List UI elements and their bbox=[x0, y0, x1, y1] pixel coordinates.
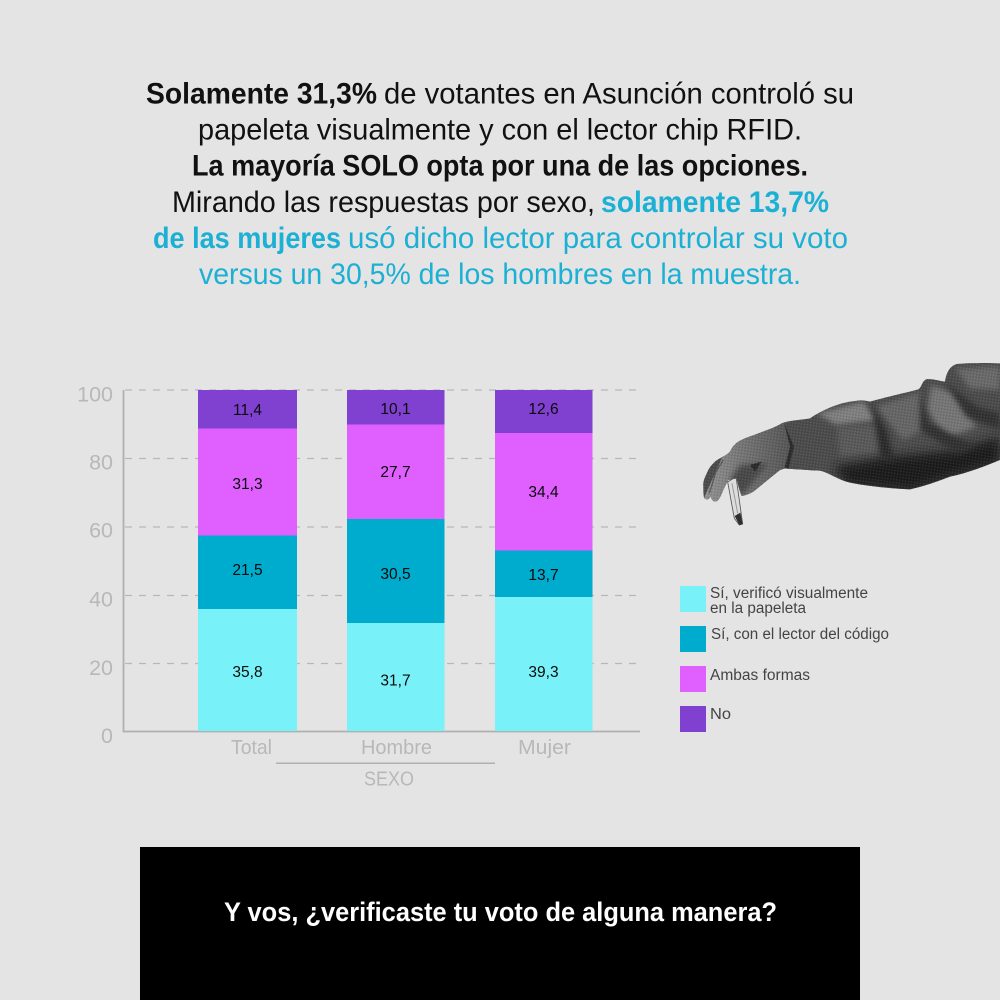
bar: Mujer: 34,4 bbox=[528, 484, 559, 501]
line 4: solamente 13,7% bbox=[601, 186, 829, 219]
y axis labels: 80 bbox=[89, 450, 113, 474]
stacked bar chart bbox=[77, 382, 640, 790]
call to action text: Y vos, ¿verificaste tu voto de alguna manera? bbox=[224, 897, 777, 927]
legend item: both bbox=[680, 666, 810, 692]
line 5: de las mujeres bbox=[153, 222, 341, 255]
legend item: no bbox=[680, 706, 731, 732]
category labels: Hombre bbox=[361, 737, 432, 759]
legend item: no: No bbox=[710, 706, 731, 723]
line 2: papeleta visualmente y con el lector chip RFID. bbox=[198, 114, 802, 146]
bar: Mujer: 39,3 bbox=[528, 664, 559, 681]
y axis labels bbox=[77, 382, 113, 748]
line 1: de votantes en Asunción controló su bbox=[384, 78, 854, 110]
bar: Total: 11,4 bbox=[233, 402, 262, 419]
grid lines bbox=[125, 390, 640, 664]
y axis labels: 20 bbox=[89, 656, 113, 680]
bar: Mujer bbox=[495, 390, 592, 731]
category labels: SEXO bbox=[364, 768, 414, 790]
group bracket line bbox=[276, 762, 495, 764]
ballot slip bbox=[728, 477, 743, 525]
sleeve folds bbox=[817, 402, 877, 425]
hand tones bbox=[704, 421, 790, 502]
bar: Hombre: 31,7 bbox=[380, 672, 411, 690]
legend item: reader bbox=[680, 626, 889, 652]
line 1: Solamente 31,3% bbox=[146, 78, 377, 110]
legend bbox=[680, 585, 889, 732]
legend item: reader: Sí, con el lector del código bbox=[711, 626, 889, 643]
bar: Total: 21,5 bbox=[232, 562, 263, 579]
bar: Mujer: 12,6 bbox=[528, 401, 559, 418]
y axis labels: 40 bbox=[89, 588, 113, 612]
bar: Total bbox=[198, 390, 297, 731]
bar: Hombre: 10,1 bbox=[380, 401, 411, 418]
bar: Hombre bbox=[347, 390, 444, 731]
line 3: La mayoría SOLO opta por una de las opciones. bbox=[192, 150, 808, 182]
icon: hand and arm holding a ballot bbox=[703, 363, 1000, 526]
category labels: Total bbox=[231, 737, 272, 759]
line 1 bbox=[146, 78, 854, 110]
bar: Mujer: 13,7 bbox=[528, 567, 559, 584]
axes bbox=[124, 390, 640, 732]
heading text block bbox=[146, 78, 854, 291]
line 5: usó dicho lector para controlar su voto bbox=[348, 222, 848, 255]
bar: Total: 31,3 bbox=[232, 476, 263, 493]
cuff bbox=[784, 423, 821, 471]
legend item: visual: Sí, verificó visualmente bbox=[710, 585, 868, 602]
y axis labels: 0 bbox=[101, 724, 113, 748]
sleeve and hand shape bbox=[703, 363, 1000, 502]
call to action panel bbox=[140, 847, 860, 1000]
legend item: visual bbox=[680, 585, 868, 617]
bar: Hombre: 27,7 bbox=[380, 464, 411, 481]
y axis labels: 100 bbox=[77, 382, 113, 406]
legend item: both: Ambas formas bbox=[710, 667, 810, 684]
legend item: visual: en la papeleta bbox=[710, 600, 806, 617]
category labels bbox=[231, 737, 571, 790]
line 4: Mirando las respuestas por sexo, bbox=[172, 186, 595, 219]
bar: Hombre: 30,5 bbox=[380, 566, 411, 583]
line 6: versus un 30,5% de los hombres en la muestra. bbox=[199, 258, 801, 291]
y axis labels: 60 bbox=[89, 518, 113, 542]
line 4 bbox=[172, 186, 829, 219]
category labels: Mujer bbox=[518, 737, 571, 759]
bar: Total: 35,8 bbox=[232, 664, 263, 681]
